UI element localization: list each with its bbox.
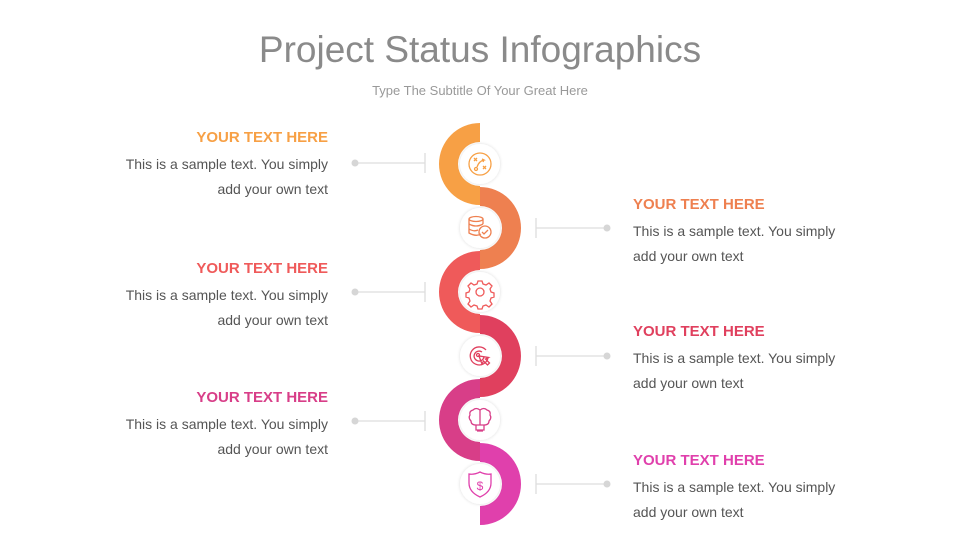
icon: database — [469, 216, 491, 238]
icon: brain — [469, 408, 491, 431]
text block 5: This is a sample text. You simply — [126, 416, 328, 432]
text block 1 — [126, 129, 328, 197]
text block 1: add your own text — [217, 181, 328, 197]
text block 3: This is a sample text. You simply — [126, 287, 328, 303]
title: Project Status Infographics — [259, 29, 701, 70]
text block 3 — [126, 260, 328, 328]
icon: strategy — [469, 153, 491, 175]
text block 6: add your own text — [633, 504, 744, 520]
text block 6: This is a sample text. You simply — [633, 479, 835, 495]
text block 2: add your own text — [633, 248, 744, 264]
icon: shield dollar: $ — [477, 479, 484, 493]
text block 4 — [633, 323, 836, 391]
icon circles — [460, 144, 500, 504]
text block 5: YOUR TEXT HERE — [196, 389, 328, 406]
icon: target — [470, 347, 490, 365]
subtitle: Type The Subtitle Of Your Great Here — [372, 83, 588, 98]
text block 4: This is a sample text. You simply — [633, 350, 835, 366]
icon: shield dollar — [469, 472, 491, 497]
text block 6 — [633, 452, 836, 520]
ribbon segments — [439, 123, 521, 525]
text block 1: YOUR TEXT HERE — [196, 129, 328, 146]
text block 4: add your own text — [633, 375, 744, 391]
text block 3: add your own text — [217, 312, 328, 328]
text block 1: This is a sample text. You simply — [126, 156, 328, 172]
connectors — [352, 153, 610, 494]
icon: gear — [466, 281, 494, 309]
text block 2: YOUR TEXT HERE — [633, 196, 765, 213]
text block 5 — [126, 389, 328, 457]
text block 3: YOUR TEXT HERE — [196, 260, 328, 277]
text block 4: YOUR TEXT HERE — [633, 323, 765, 340]
text block 5: add your own text — [217, 441, 328, 457]
text block 2 — [633, 196, 836, 264]
text block 2: This is a sample text. You simply — [633, 223, 835, 239]
text block 6: YOUR TEXT HERE — [633, 452, 765, 469]
